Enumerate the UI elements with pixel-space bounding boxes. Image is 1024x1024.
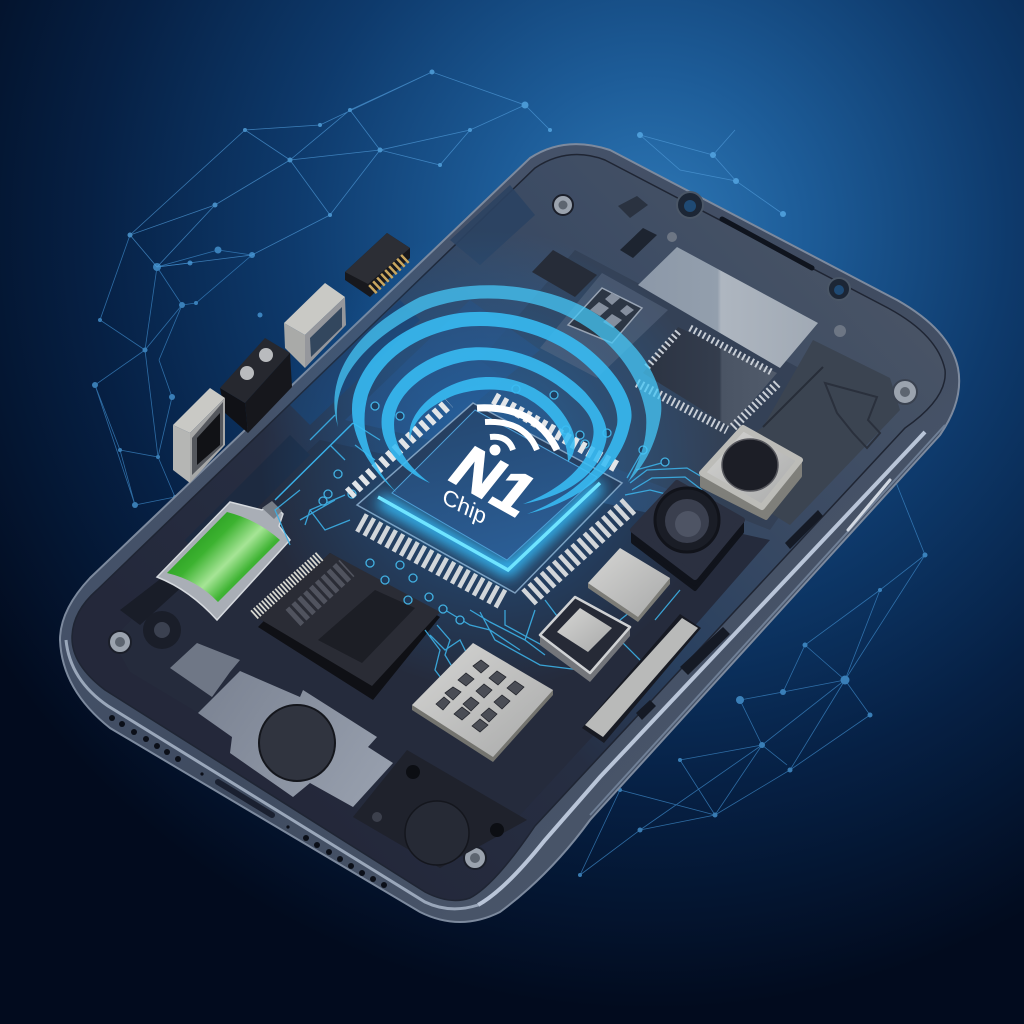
charging port <box>218 782 272 815</box>
side button <box>848 480 890 530</box>
camera silver module <box>702 428 800 518</box>
battery <box>157 501 290 620</box>
speaker box <box>353 750 527 868</box>
chip package <box>357 403 622 593</box>
speaker holes <box>109 715 387 888</box>
phone body <box>60 144 959 922</box>
right side dark strips <box>636 510 823 720</box>
metal plate with circle <box>170 643 393 807</box>
window panel <box>638 247 818 368</box>
phone back glass <box>72 155 945 900</box>
silver square chip <box>588 548 670 622</box>
pin rows <box>647 330 680 367</box>
earpiece and top sensors <box>618 192 850 300</box>
network: right cluster <box>578 478 928 877</box>
chip label N1: N1 <box>436 435 551 528</box>
floating chip black <box>345 233 410 297</box>
chip pins lower right <box>528 505 630 598</box>
metal rim highlight right <box>478 432 925 905</box>
chip pins upper left <box>349 403 449 494</box>
framed square chip <box>540 597 630 682</box>
camera black module <box>633 483 742 589</box>
phone side frame <box>60 144 959 922</box>
screws <box>109 195 917 869</box>
circuit traces <box>275 385 707 690</box>
small chips top <box>532 250 668 378</box>
floating sensor light <box>173 388 225 483</box>
metal keypad chip <box>412 643 553 762</box>
floating camera module black <box>220 338 292 433</box>
network: top cluster <box>128 70 786 267</box>
chip pins lower left <box>360 522 503 600</box>
wave arcs <box>334 285 661 514</box>
silver bar <box>582 614 701 743</box>
metal rim highlight bottom <box>66 640 478 909</box>
large processor top right <box>637 327 778 430</box>
chip label Chip: Chip <box>439 483 490 529</box>
chip glow <box>380 484 600 570</box>
wifi icon <box>477 408 557 456</box>
outer rim line right <box>590 425 945 815</box>
chip face <box>392 410 597 560</box>
chip assembly <box>349 398 630 600</box>
cyan board trace <box>275 423 353 500</box>
memory chip <box>254 553 440 700</box>
network: left cluster <box>92 235 262 508</box>
chip pins upper right <box>494 398 617 467</box>
floating module light grey <box>284 283 346 368</box>
